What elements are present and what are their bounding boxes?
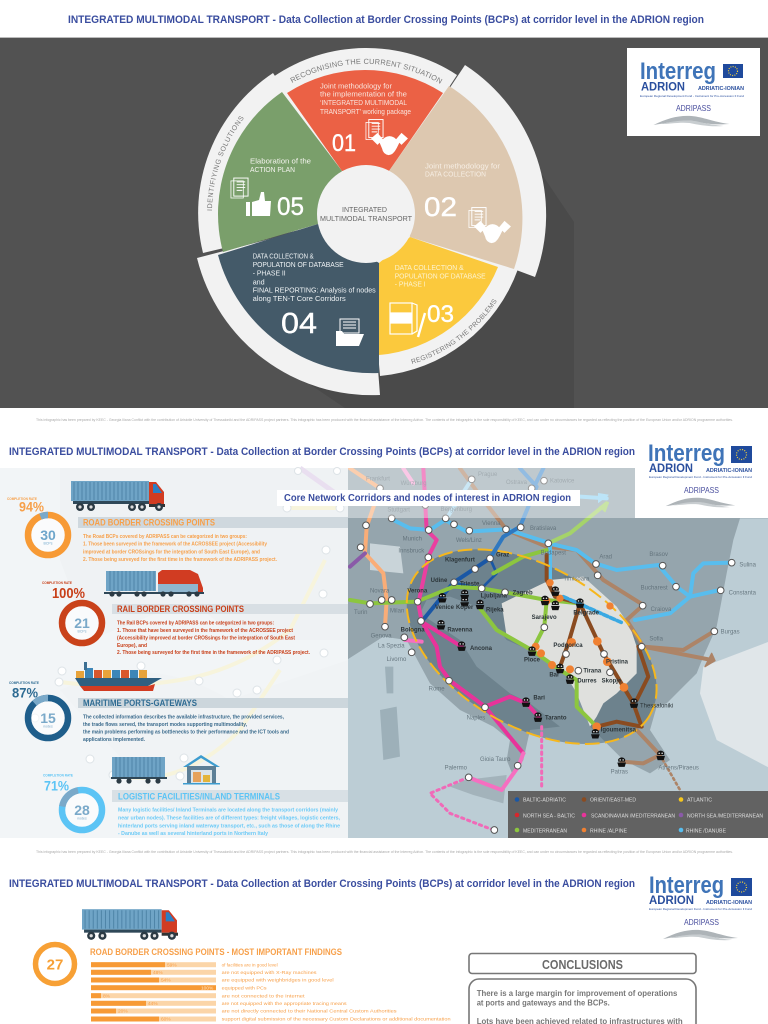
- map title: Core Network Corridors and nodes of interest in ADRION region: [284, 492, 571, 504]
- segment 04 dark blue: along TEN-T Core Corridors: [253, 294, 346, 303]
- map labels outside region: Vienna: [482, 521, 501, 527]
- map top fade: [348, 468, 635, 518]
- band heading road: [78, 517, 348, 529]
- completion rate 87: COMPLETION RATE: [9, 681, 39, 685]
- map labels outside region: Craiova: [651, 607, 672, 613]
- segment 03 yellow: [379, 237, 498, 355]
- dashed ADRION ellipse: [406, 548, 658, 745]
- band heading road: ROAD BORDER CROSSING POINTS: [83, 518, 215, 529]
- map labels outside region: Bergenburg: [441, 507, 472, 513]
- map labels outside region: Munich: [403, 537, 422, 543]
- legend: SCANDINAVIAN /MEDITERRANEAN: [591, 814, 675, 820]
- road text: [83, 534, 277, 563]
- logo page 3: ADRIATIC-IONIAN: [706, 900, 752, 906]
- legend: NORTH SEA /MEDITERRANEAN: [687, 814, 763, 820]
- segment 04 dark blue: - PHASE II: [253, 269, 286, 278]
- segment 02 tan: DATA COLLECTION: [425, 170, 486, 179]
- donut 30: [28, 515, 68, 555]
- maritime text: The collected information describes the available infrastructure, the provided services,: [83, 714, 284, 720]
- map labels outside region: Innsbruck: [398, 549, 424, 555]
- logo page 2: [648, 440, 752, 507]
- highlighted ellipse: [406, 549, 656, 744]
- ring label: registering: REGISTERING THE PROBLEMS: [411, 299, 496, 364]
- outer ring top: [273, 48, 457, 214]
- panel: corridor map: Ploce: [524, 658, 541, 664]
- findings bar chart: are not connected to the Internet: [222, 993, 305, 999]
- donut 15: [28, 698, 68, 738]
- maritime text: [83, 714, 289, 743]
- map labels outside region: [354, 472, 757, 776]
- findings bar chart: [91, 962, 451, 1023]
- legend: ORIENT/EAST-MED: [590, 798, 636, 804]
- segment 03 yellow: - PHASE I: [395, 280, 426, 289]
- segment 04 dark blue: and: [253, 277, 265, 286]
- map labels outside region: Sulina: [739, 563, 757, 569]
- wheel diagram: [197, 48, 546, 396]
- completion rate 94: [7, 497, 44, 515]
- findings bar chart: equipped with PCs: [222, 985, 267, 991]
- panel: corridor map: Zagreb: [513, 591, 533, 597]
- band heading rail: [112, 604, 348, 615]
- band heading logistics: LOGISTIC FACILITIES/INLAND TERMINALS: [118, 792, 280, 803]
- findings bar chart: are not directly connected to their National Central Custom Authorities: [222, 1009, 397, 1015]
- panel: dark wheel section: [0, 37, 768, 408]
- donut 21: BCPs: [78, 630, 87, 634]
- completion rate 100: 100%: [52, 585, 85, 602]
- segment 01 red: TRANSPORT’ working package: [320, 107, 411, 116]
- Turkey: [700, 640, 768, 770]
- findings bar chart: support digital submission of the necessary Custom Declarations or additional documentation: [222, 1017, 451, 1023]
- icon: filing cabinet and pencil: [390, 303, 425, 337]
- panel: corridor map: Sarajevo: [532, 615, 557, 621]
- completion rate 100: [42, 581, 85, 602]
- segment 04 dark blue: FINAL REPORTING: Analysis of nodes: [253, 286, 376, 295]
- centre circle: MULTIMODAL TRANSPORT: [320, 214, 413, 223]
- band heading maritime: [78, 698, 348, 709]
- logo box top: ADRIATIC-IONIAN: [698, 86, 744, 92]
- white nodes: [357, 476, 735, 833]
- icon: truck: [71, 481, 165, 511]
- road text: improved at border CROSsings for the integration of South East Europe), and: [83, 549, 260, 555]
- map labels outside region: Constanta: [729, 591, 757, 597]
- panel: left faded map background: [0, 468, 348, 838]
- logo page 2: ADRIATIC-IONIAN: [706, 468, 752, 474]
- map labels outside region: Katowice: [550, 479, 575, 485]
- panel: corridor map: Skopje: [602, 678, 622, 684]
- conclusions box: at ports and gateways and the BCPs.: [477, 997, 610, 1007]
- icon: truck page 3: [82, 909, 178, 940]
- rail text: [117, 620, 310, 656]
- panel: corridor map: Belgrade: [573, 610, 600, 616]
- panel: corridor map: Ravenna: [447, 628, 473, 634]
- icon: document: [231, 178, 248, 198]
- donut 30: 30: [40, 527, 56, 543]
- map labels outside region: Genova: [371, 633, 392, 639]
- centre circle: [317, 165, 415, 263]
- panel: corridor map: Koper: [456, 605, 474, 611]
- outer ring bottom left: [197, 214, 380, 395]
- completion rate 94: 94%: [19, 499, 44, 515]
- logo page 3: [649, 872, 752, 940]
- band heading rail: RAIL BORDER CROSSING POINTS: [117, 604, 244, 615]
- logo page 3: European Regional Development Fund - Instrument for Pre-Accession II Fund: [649, 907, 752, 911]
- map labels outside region: Bucharest: [641, 586, 668, 592]
- findings heading: ROAD BORDER CROSSING POINTS - MOST IMPORTANT FINDINGS: [90, 947, 342, 958]
- panel: corridor map: Ancona: [470, 646, 493, 652]
- rail text: Europe), and: [117, 643, 147, 649]
- logo box top: European Regional Development Fund - Instrument for Pre-Accession II Fund: [640, 94, 744, 98]
- panel: corridor map: Rijeka: [486, 607, 504, 613]
- segment 01 red: 01: [332, 130, 356, 157]
- legend: RHINE /DANUBE: [686, 828, 727, 834]
- panel: corridor map: Taranto: [545, 716, 567, 722]
- findings bar chart: of facilities are in good level: [222, 962, 278, 968]
- rail text: 2. Those being surveyed for the first time in the framework of the ADRIPASS project.: [117, 650, 310, 656]
- ring 27: 27: [47, 956, 63, 974]
- segment 05 green: ACTION PLAN: [250, 165, 295, 174]
- conclusions box: There is a large margin for improvement of operations: [477, 988, 678, 998]
- road text: 1. Those been surveyed in the framework of the ACROSSEE project (Accessibility: [83, 542, 267, 548]
- icon: container wagon: [111, 757, 167, 784]
- logo box top: Interreg: [640, 58, 716, 85]
- logistics text: near urban nodes). These facilities are of different types: freight villages, logistic centers,: [118, 816, 340, 822]
- maritime text: applications implemented.: [83, 737, 145, 743]
- completion rate 71: COMPLETION RATE: [43, 774, 73, 778]
- segment 04 dark blue: 04: [281, 308, 317, 340]
- legend: [508, 791, 768, 839]
- rail text: The Rail BCPs covered by ADRIPASS can be categorized in two groups:: [117, 620, 274, 626]
- legend: NORTH SEA - BALTIC: [523, 814, 575, 820]
- footnote 1: This infographic has been prepared by KEEC - Georgia Iliana Conflict with the contribution of Aristotle University of Thessaloniki and the ADRIPASS project partners. This infographic has been produced with the financial assistance of the Interreg Adrion. The contents of the infographic is the sole responsibility of KEEC, and can under no circumstances be regarded as reflecting the position of the European Union and/or ADRION programme authorities.: [36, 418, 733, 422]
- panel: corridor map: Bar: [549, 673, 560, 679]
- map labels outside region: Livorno: [387, 657, 407, 663]
- panel: corridor map: Venice: [435, 605, 455, 611]
- completion rate 100: COMPLETION RATE: [42, 581, 72, 585]
- panel: corridor map: Klagenfurt: [445, 557, 475, 563]
- mainland Europe and Italy: [347, 460, 768, 777]
- band heading maritime: MARITIME PORTS-GATEWAYS: [83, 698, 197, 709]
- findings bar chart: 54%: [161, 978, 171, 984]
- logo page 2: ADRIPASS: [684, 486, 719, 495]
- map labels outside region: Patras: [611, 770, 628, 776]
- segment 04 dark blue: DATA COLLECTION &: [253, 252, 314, 261]
- completion rate 71: 71%: [44, 778, 69, 794]
- map labels outside region: Sofia: [649, 636, 664, 642]
- map labels outside region: Timisoara: [563, 577, 590, 583]
- map labels outside region: Palermo: [445, 765, 468, 771]
- page 3 title: INTEGRATED MULTIMODAL TRANSPORT - Data Collection at Border Crossing Points (BCPs) at corridor level in the ADRION region: [9, 878, 635, 890]
- segment 05 green: [218, 92, 342, 252]
- conclusions header: CONCLUSIONS: [542, 958, 623, 972]
- segment 02 tan: Joint methodology for: [425, 162, 501, 171]
- maritime text: the trade flows served, the transport modes supporting multimodality,: [83, 722, 247, 728]
- Sardinia and Corsica: [380, 667, 400, 760]
- icon: thumbs up: [246, 192, 271, 216]
- section: road border crossing points: [7, 481, 348, 563]
- segment 04 dark blue: POPULATION OF DATABASE: [253, 260, 344, 269]
- icon: container ship: [75, 662, 162, 691]
- panel: corridor map: Ljubljana: [481, 594, 508, 600]
- donut 15: nodes: [43, 724, 53, 728]
- findings bar chart: are not equipped with the appropriate tracing means: [222, 1001, 347, 1007]
- long shadow of wheel: [296, 167, 574, 408]
- findings bar chart: 60%: [161, 1017, 171, 1023]
- map labels outside region: Prague: [478, 472, 498, 478]
- outer ring right: [366, 65, 546, 277]
- map labels outside region: Stuttgart: [387, 508, 410, 514]
- map labels outside region: Brasov: [649, 552, 668, 558]
- donut 21: [62, 603, 102, 643]
- logo page 2: Interreg: [648, 440, 725, 467]
- page 2 title: INTEGRATED MULTIMODAL TRANSPORT - Data Collection at Border Crossing Points (BCPs) at corridor level in the ADRION region: [9, 446, 635, 458]
- map labels outside region: Novara: [370, 588, 390, 594]
- logo box top: [627, 48, 760, 136]
- Sicily: [450, 775, 507, 803]
- legend: RHINE /ALPINE: [590, 828, 628, 834]
- panel: corridor map: Tirana: [583, 669, 602, 675]
- map labels outside region: Budapest: [541, 551, 566, 557]
- icon: train: [104, 570, 204, 597]
- map title: [277, 490, 580, 506]
- outer ring bottom right: [366, 214, 518, 376]
- donut 28: [62, 790, 102, 830]
- panel: corridor map: Thessaloniki: [640, 703, 673, 709]
- logistics text: Many logistic facilities/ Inland Terminals are located along the transport corridors (mainly: [118, 808, 338, 814]
- ring label: identifying: IDENTIFIYING SOLUTIONS: [207, 116, 244, 210]
- Balkans light area: [502, 577, 637, 727]
- findings bar chart: 44%: [148, 1001, 158, 1007]
- logo page 3: ADRION: [649, 893, 694, 907]
- footnote 2: This infographic has been prepared by KEEC - Georgia Iliana Conflict with the contribution of Aristotle University of Thessaloniki and the ADRIPASS project partners. This infographic has been produced with the financial assistance of the Interreg Adrion. The contents of the infographic is the sole responsibility of KEEC, and can under no circumstances be regarded as reflecting the position of the European Union and/or ADRION programme authorities.: [36, 850, 733, 854]
- icon: document and handshake: [366, 120, 408, 155]
- panel: corridor map: Verona: [407, 589, 428, 595]
- findings bar chart: 100%: [201, 985, 214, 991]
- road text: The Road BCPs covered by ADRIPASS can be categorized in two groups:: [83, 534, 247, 540]
- findings bar chart: 59%: [167, 962, 177, 968]
- map labels outside region: Burgas: [721, 629, 740, 635]
- page 1 title: INTEGRATED MULTIMODAL TRANSPORT - Data Collection at Border Crossing Points (BCPs) at corridor level in the ADRION region: [68, 14, 704, 26]
- map labels outside region: Naples: [467, 716, 485, 722]
- logistics text: hinterland ports serving inland waterway transport, etc., such as those of along the Rhine: [118, 823, 340, 829]
- panel: corridor map: Pristina: [606, 660, 629, 666]
- segment 03 yellow: 03: [427, 301, 454, 328]
- legend: MEDITERRANEAN: [523, 828, 567, 834]
- donut 28: nodes: [77, 816, 87, 820]
- panel: corridor map: Graz: [496, 553, 509, 559]
- map labels outside region: La Spezia: [378, 643, 405, 649]
- segment 03 yellow: DATA COLLECTION &: [395, 263, 464, 272]
- panel: corridor map: Trieste: [460, 581, 480, 587]
- panel: corridor map: Durres: [577, 678, 597, 684]
- logo page 3: ADRIPASS: [684, 918, 719, 927]
- section: maritime ports: [9, 662, 348, 743]
- donut 28: 28: [74, 802, 90, 818]
- findings bar chart: are equipped with weighbridges in good level: [222, 978, 334, 984]
- segment 03 yellow: POPULATION OF DATABASE: [395, 271, 486, 280]
- panel: corridor map: [347, 460, 768, 843]
- map labels outside region: Würzburg: [401, 481, 427, 487]
- section: rail border crossing points: [42, 570, 348, 656]
- outer ring left: [198, 73, 366, 253]
- segment 01 red: [287, 70, 443, 171]
- segment 01 red: Joint methodology for: [320, 82, 393, 90]
- segment 02 tan: 02: [424, 192, 457, 222]
- icon: document and handshake: [469, 208, 511, 243]
- donut 30: BCPs: [44, 542, 53, 546]
- logo box top: ADRIPASS: [676, 104, 711, 113]
- map labels outside region: Athens/Piraeus: [658, 765, 699, 771]
- icon: folder with documents: [336, 319, 364, 346]
- segment 05 green: Elaboration of the: [250, 157, 311, 166]
- segment 01 red: ‘INTEGRATED MULTIMODAL: [320, 98, 407, 107]
- panel: corridor map: Bari: [533, 695, 545, 701]
- logo page 2: ADRION: [649, 461, 693, 475]
- logo box top: ADRION: [641, 80, 685, 94]
- corridor routes: [350, 468, 732, 830]
- map labels outside region: Milan: [390, 608, 404, 614]
- segment 02 tan: [389, 86, 522, 269]
- donut 21: 21: [74, 615, 90, 631]
- completion rate 94: COMPLETION RATE: [7, 497, 37, 501]
- segment 01 red: the implementation of the: [320, 90, 407, 98]
- findings bar chart: 48%: [153, 970, 163, 976]
- map labels outside region: Turin: [354, 610, 367, 616]
- donut 15: 15: [40, 710, 56, 726]
- map labels outside region: Rome: [429, 686, 445, 692]
- panel: corridor map: Igoumenitsa: [601, 728, 637, 734]
- lighter Western Europe: [370, 543, 403, 573]
- panel: corridor map: Bologna: [401, 628, 425, 634]
- road text: 2. Those being surveyed for the first time in the framework of the ADRIPASS project.: [83, 557, 277, 563]
- logo page 3: Interreg: [649, 872, 724, 899]
- map labels outside region: Arad: [599, 555, 612, 561]
- conclusions box: [469, 979, 696, 1024]
- maritime text: the main problems performing as bottlenecks to their performance and the ICT tools and: [83, 730, 289, 736]
- findings bar chart: 8%: [103, 993, 111, 999]
- centre circle: INTEGRATED: [342, 205, 387, 214]
- rail text: 1. Those that have been surveyed in the framework of the ACROSSEE project: [117, 628, 293, 634]
- segment 05 green: 05: [277, 193, 304, 221]
- rail text: (Accessibility improved at border CROSsings for the integration of South East: [117, 635, 295, 641]
- ring 27: [36, 944, 74, 984]
- map labels outside region: Ostrava: [506, 480, 528, 486]
- logistics text: - Danube as well as several hinterland ports in Northern Italy: [118, 831, 268, 837]
- map labels outside region: Wels/Linz: [456, 538, 482, 544]
- ring label: recognising: RECOGNISING THE CURRENT SITUATION: [290, 58, 442, 84]
- port icons: [437, 586, 665, 767]
- findings bar chart: 20%: [118, 1009, 128, 1015]
- legend: BALTIC-ADRIATIC: [523, 798, 566, 804]
- findings bar chart: are not equipped with X-Ray machines: [222, 970, 317, 976]
- segment 04 dark blue: [218, 224, 379, 373]
- panel: corridor map: Udine: [431, 578, 448, 584]
- logo page 2: European Regional Development Fund - Instrument for Pre-Accession II Fund: [649, 475, 752, 479]
- icon: warehouse: [183, 755, 220, 784]
- map labels outside region: Gioia Tauro: [480, 757, 511, 763]
- map labels outside region: Frankfurt: [366, 477, 390, 483]
- completion rate 87: 87%: [12, 685, 39, 701]
- sea: [348, 518, 768, 838]
- orange nodes: [532, 579, 628, 731]
- map labels outside region: Bratislava: [530, 526, 557, 532]
- panel: corridor map: Podgorica: [553, 643, 583, 649]
- conclusions header: [469, 954, 696, 974]
- legend: ATLANTIC: [687, 798, 712, 804]
- logistics text: [118, 808, 340, 837]
- logo area background: [635, 440, 768, 518]
- section: logistic facilities: [43, 755, 348, 837]
